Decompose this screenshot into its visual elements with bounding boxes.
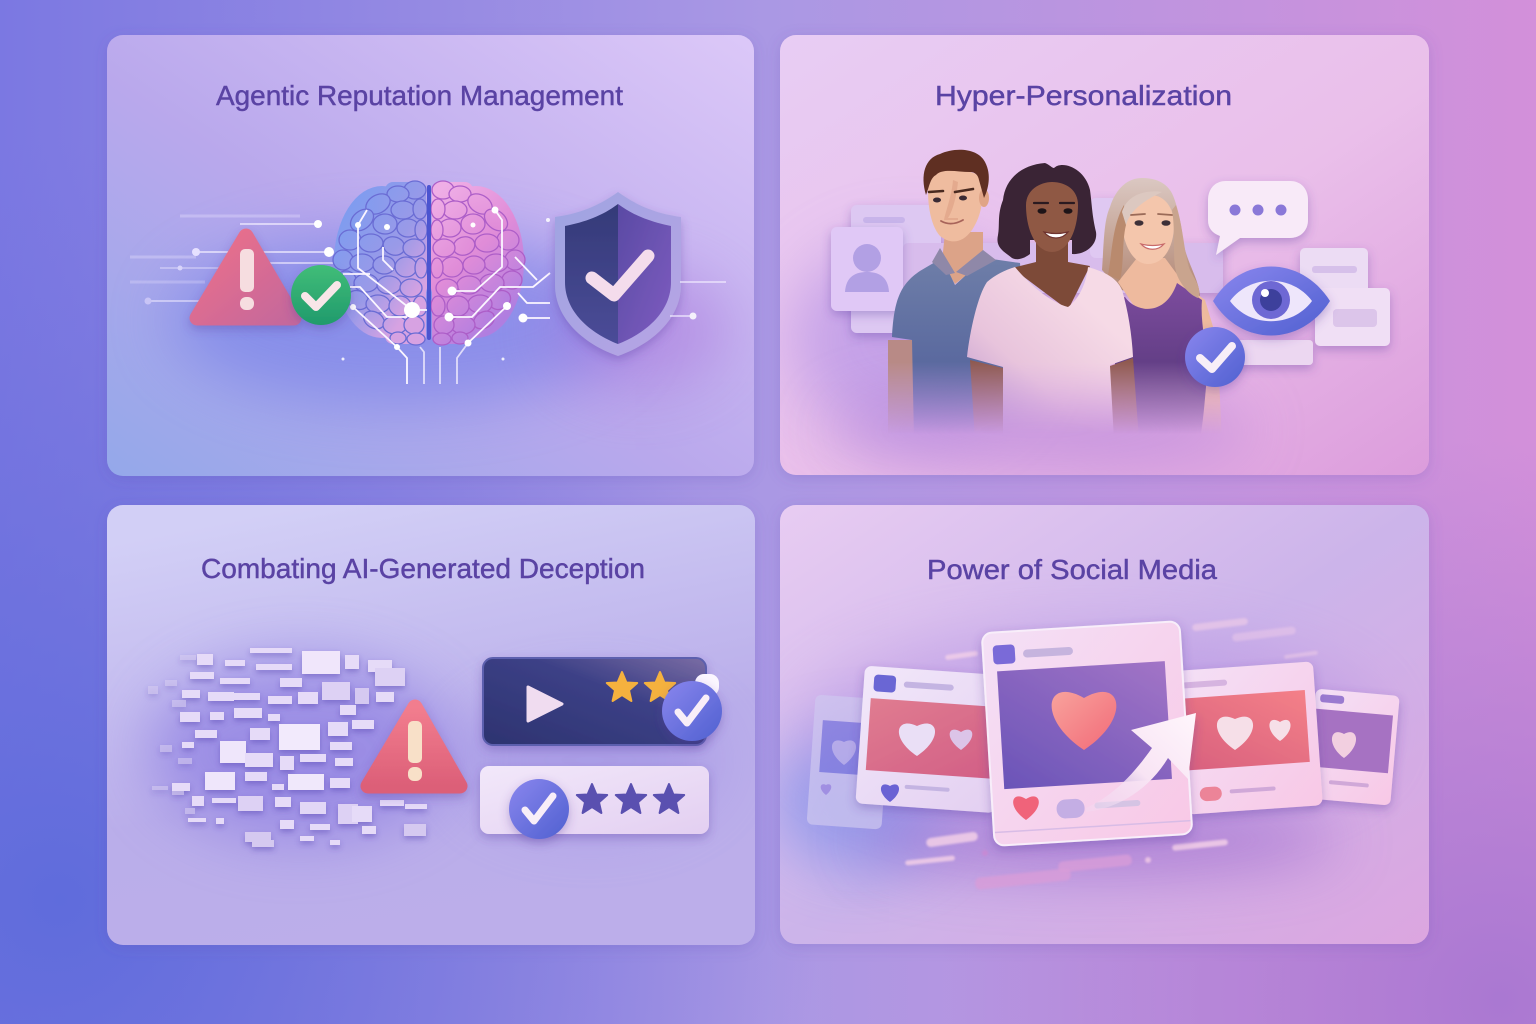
person: central woman bbox=[967, 163, 1139, 440]
circuit lines left bbox=[130, 216, 345, 304]
right hemisphere bbox=[428, 181, 525, 345]
far-right post card bbox=[1306, 689, 1400, 806]
icon: shield with check bbox=[555, 192, 681, 356]
growth arrow bbox=[1086, 713, 1196, 812]
panel: Hyper-Personalization bbox=[780, 35, 1429, 475]
panel: Combating AI-Generated Deception bbox=[107, 505, 755, 945]
right post card bbox=[1177, 661, 1323, 815]
purple stars bbox=[577, 784, 684, 813]
brain circuit traces bbox=[343, 206, 550, 384]
icon: alert triangle bbox=[197, 236, 294, 318]
icon: check badge bbox=[1185, 327, 1245, 387]
heading: Hyper-Personalization: Hyper-Personalization bbox=[935, 80, 1232, 111]
icon: green check badge bbox=[291, 265, 351, 325]
icon: eye bbox=[1213, 266, 1330, 336]
gold stars bbox=[607, 672, 675, 701]
people group bbox=[888, 150, 1222, 440]
corner glint bbox=[695, 674, 719, 696]
heading: Power of Social Media: Power of Social Media bbox=[927, 554, 1217, 585]
person: blonde woman bbox=[1102, 178, 1222, 440]
heading: Agentic Reputation Management: Agentic Reputation Management bbox=[216, 80, 623, 111]
panel: Agentic Reputation Management bbox=[107, 35, 754, 476]
person: man bbox=[888, 150, 1020, 430]
main post card bbox=[982, 621, 1196, 846]
check badge bbox=[509, 779, 569, 839]
circuit lines right bbox=[342, 218, 726, 360]
fragmented content mosaic bbox=[148, 648, 427, 847]
icon: small heart bbox=[1013, 796, 1039, 820]
check badge bbox=[662, 681, 722, 741]
panel: Power of Social Media bbox=[770, 505, 1429, 944]
heading: Combating AI-Generated Deception: Combating AI-Generated Deception bbox=[201, 553, 645, 584]
icon: alert triangle bbox=[368, 707, 460, 786]
icon: speech bubble bbox=[1208, 181, 1308, 255]
far-left post card bbox=[807, 695, 890, 829]
left post card bbox=[855, 666, 1005, 813]
star rating card bbox=[480, 766, 709, 839]
icon: brain bbox=[333, 181, 550, 384]
video review card bbox=[483, 658, 722, 745]
icon: large heart bbox=[1052, 692, 1116, 750]
icon: play bbox=[528, 687, 562, 721]
avatar card bbox=[831, 227, 903, 311]
motion streaks bbox=[905, 618, 1318, 890]
left hemisphere bbox=[333, 181, 430, 345]
background profile cards bbox=[851, 198, 1390, 365]
